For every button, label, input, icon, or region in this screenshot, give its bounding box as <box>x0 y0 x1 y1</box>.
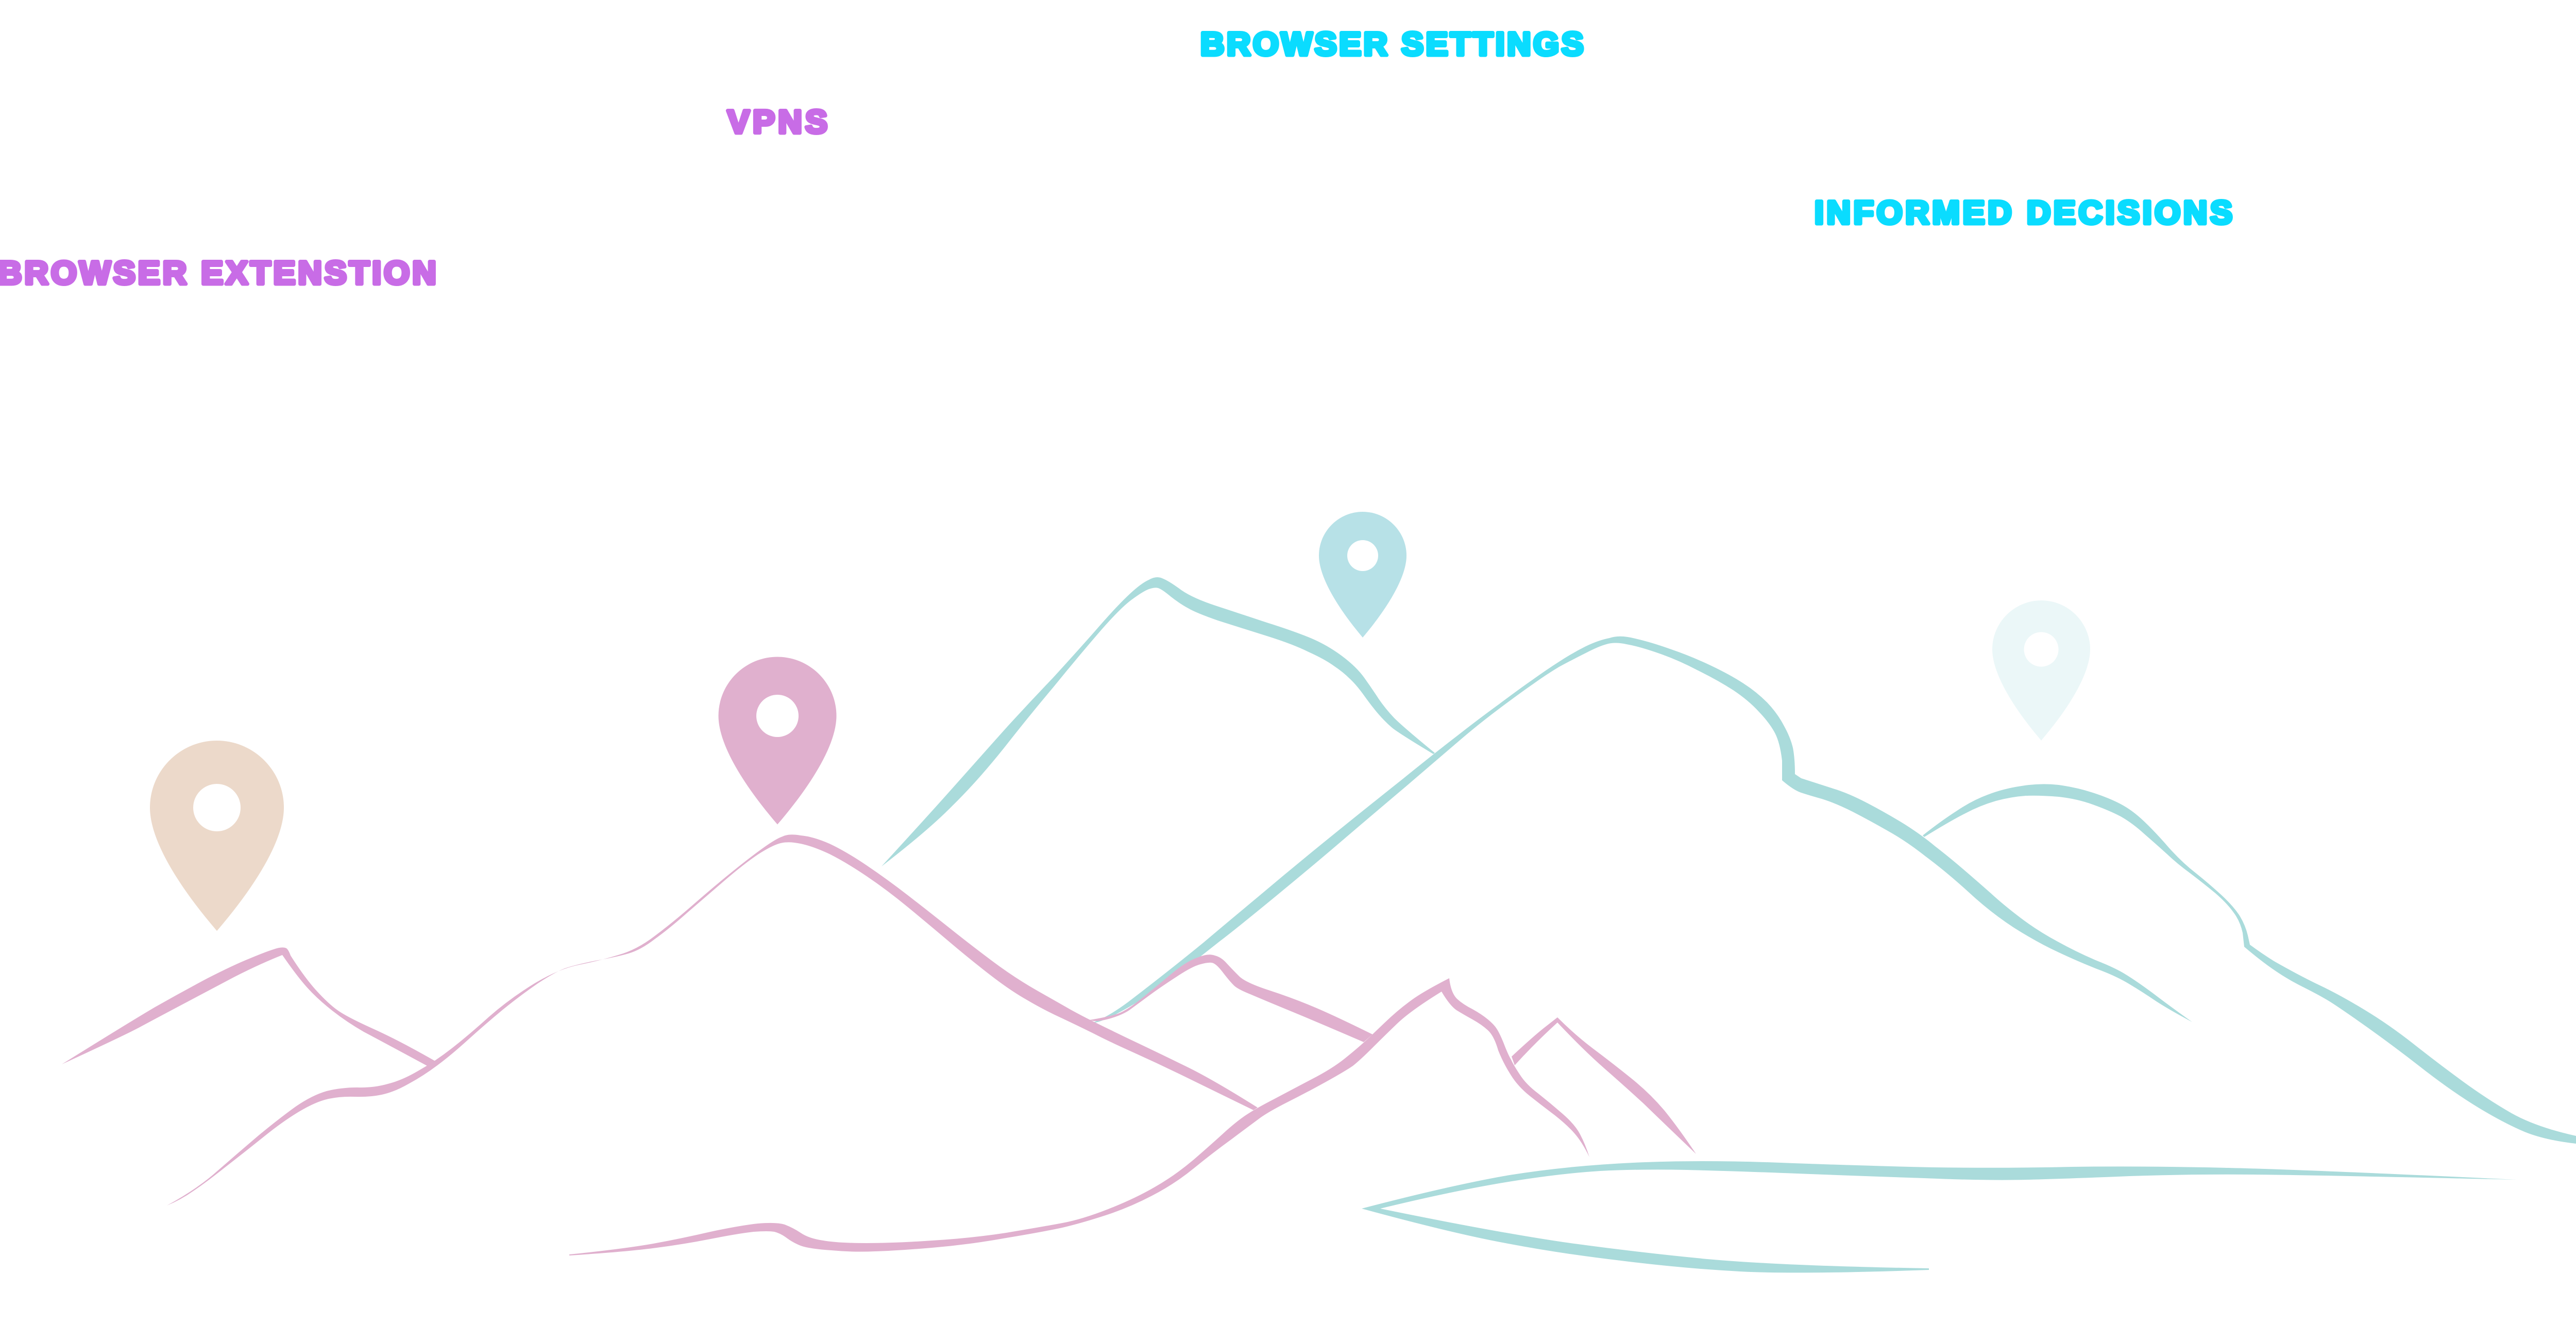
teal lake <box>1362 1161 2516 1272</box>
pink mountain: main peak <box>167 834 1258 1205</box>
label: browser extension: BROWSER EXTENSTION <box>0 255 436 291</box>
icon: beige location pin <box>150 741 284 931</box>
pink mountain: centre small peak <box>1090 954 1372 1042</box>
teal mountain: back peak <box>882 577 1435 866</box>
teal mountain: tall central peak <box>1093 636 2192 1023</box>
pink mountain: small left peak <box>62 947 435 1066</box>
label: browser settings: BROWSER SETTINGS <box>1200 26 1584 62</box>
icon: pale location pin <box>1992 600 2090 741</box>
icon: pink location pin <box>718 657 837 825</box>
icon: teal location pin <box>1319 512 1406 638</box>
label: VPNs: VPNS <box>727 104 827 140</box>
pink mountain: far right small peak <box>1512 1017 1696 1154</box>
teal mountain: right ridge <box>1923 784 2576 1144</box>
pink mountain: lower foothill and right peak <box>569 978 1589 1255</box>
label: informed decisions: INFORMED DECISIONS <box>1815 195 2232 231</box>
